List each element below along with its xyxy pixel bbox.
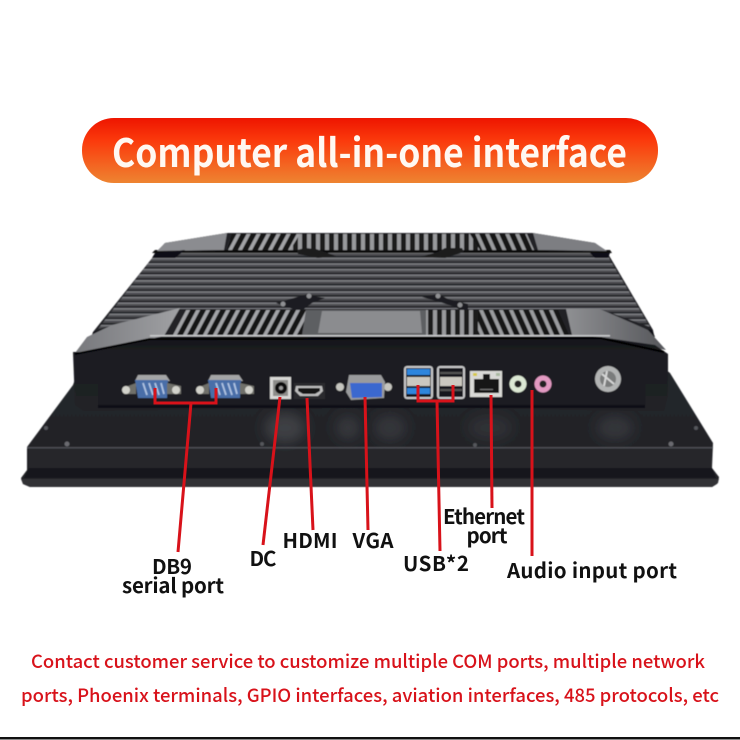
footer note — [21, 648, 719, 708]
label: DB9 serial port: serial port — [122, 569, 224, 599]
port: DC — [270, 377, 291, 399]
leader: Audio — [530, 390, 534, 556]
connector body — [73, 337, 668, 411]
front bezel plate — [21, 365, 719, 487]
leader: Ethernet — [491, 395, 492, 508]
label: DB9 serial port: DB9 — [152, 550, 192, 580]
leader: HDMI — [307, 398, 313, 530]
mounting brackets — [297, 248, 336, 258]
port: HDMI — [294, 383, 325, 399]
title text: Computer all-in-one interface — [112, 123, 627, 179]
label: Audio input port: Audio input port — [506, 554, 677, 584]
label: HDMI: HDMI — [282, 524, 338, 554]
corner latches — [93, 326, 125, 339]
label: Ethernet port: port — [466, 519, 508, 549]
leader: VGA — [365, 397, 368, 530]
footer note: ports, Phoenix terminals, GPIO interfaces, aviation interfaces, 485 protocols, etc — [21, 682, 719, 708]
top heat sink — [75, 233, 666, 353]
corner ridges — [75, 308, 180, 353]
label: USB*2: USB*2 — [403, 547, 469, 577]
port: USB 2.0 — [437, 366, 465, 399]
leader: DB9 — [155, 388, 216, 552]
lower fins — [172, 310, 310, 335]
port: Ethernet — [470, 371, 502, 397]
port: DB9 serial 2 — [196, 375, 254, 398]
leader: USB — [418, 385, 453, 551]
title banner — [82, 118, 658, 183]
leader: DC — [263, 397, 280, 545]
port: audio line green — [510, 376, 526, 392]
label: DB9 serial port — [122, 550, 224, 599]
label: Ethernet port: Ethernet — [443, 500, 525, 530]
port: DB9 serial 1 — [122, 375, 181, 398]
computer rear photo illustration — [21, 233, 719, 487]
port: VGA — [336, 375, 392, 400]
port: audio mic pink — [534, 376, 552, 392]
label: VGA: VGA — [352, 524, 394, 554]
footer note: Contact customer service to customize multiple COM ports, multiple network — [31, 648, 705, 674]
port: USB 3.0 — [404, 366, 433, 399]
power button — [595, 366, 621, 392]
label: Ethernet port — [443, 500, 525, 549]
label: DC: DC — [250, 542, 276, 572]
